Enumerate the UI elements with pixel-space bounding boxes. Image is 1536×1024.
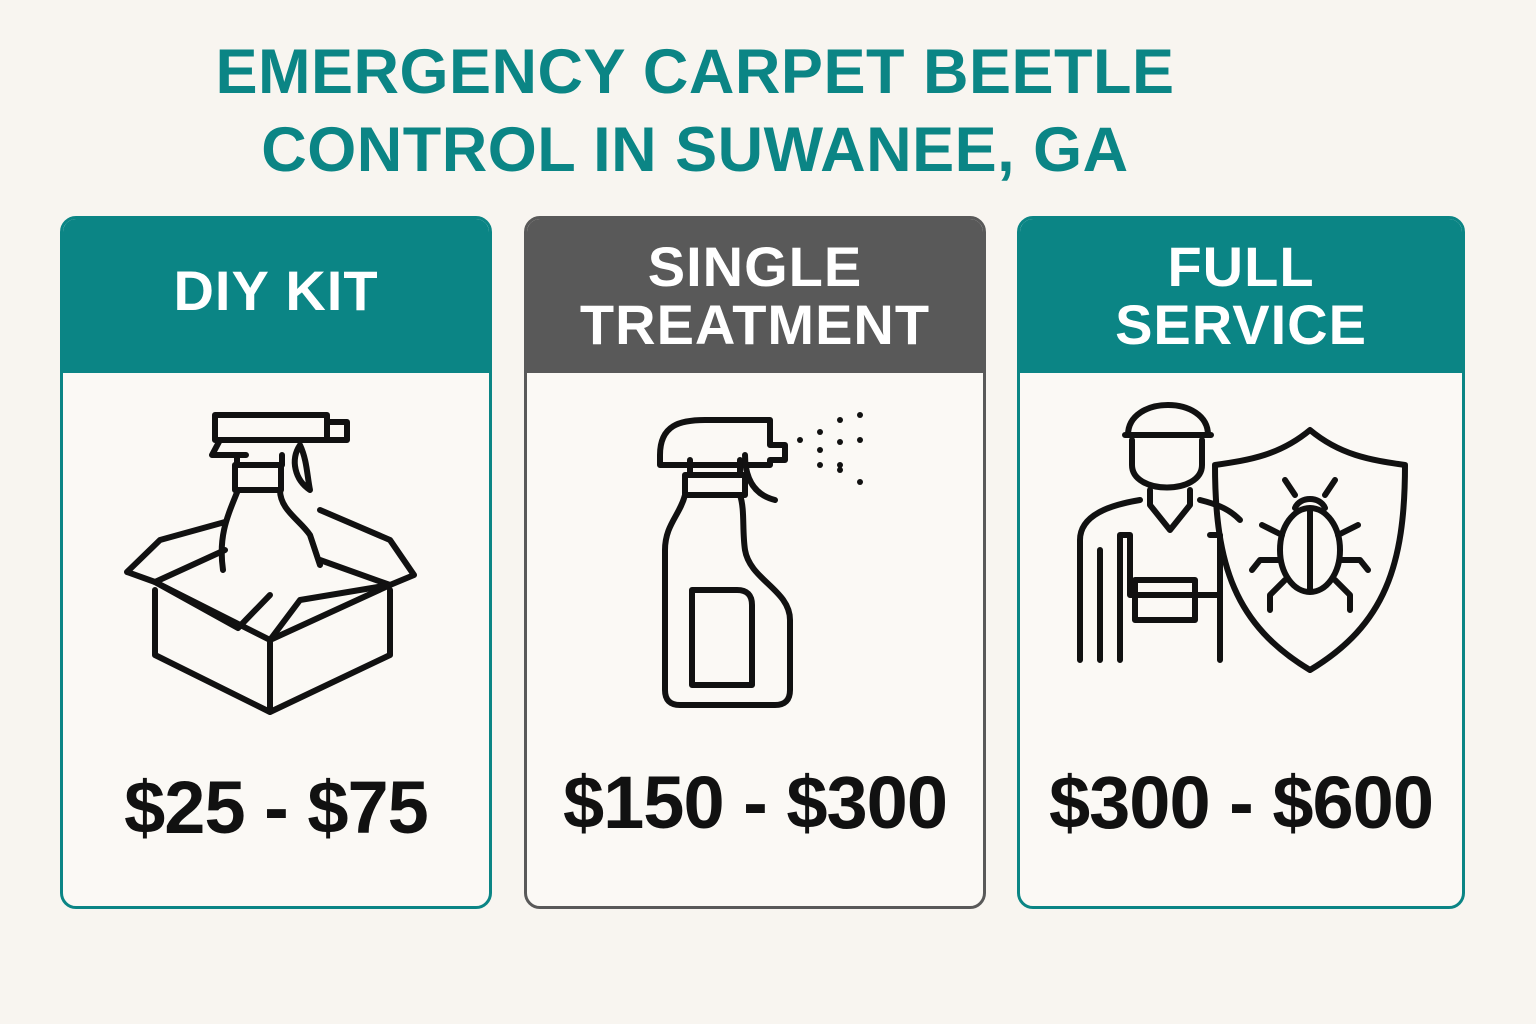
price: DIY kit: $25 - $75 xyxy=(124,766,428,849)
title: EMERGENCY CARPET BEETLE xyxy=(216,37,1174,107)
header: single treatment: TREATMENT xyxy=(580,293,930,356)
header: single treatment: SINGLE xyxy=(648,235,862,298)
icon: spray bottle xyxy=(657,412,863,708)
panel: single treatment xyxy=(524,216,986,909)
title: CONTROL IN SUWANEE, GA xyxy=(261,115,1129,185)
header: single treatment xyxy=(527,219,983,373)
header: DIY kit xyxy=(63,219,489,373)
title xyxy=(216,37,1174,185)
header: full service: FULL xyxy=(1167,235,1315,298)
price: full service: $300 - $600 xyxy=(1049,761,1433,844)
header: full service: SERVICE xyxy=(1115,293,1367,356)
icon: box with spray bottle xyxy=(124,412,417,715)
price: single treatment: $150 - $300 xyxy=(563,761,947,844)
header: full service xyxy=(1020,219,1462,373)
panel: DIY kit xyxy=(60,216,492,909)
header: DIY kit: DIY KIT xyxy=(173,259,379,322)
icon: technician with beetle shield xyxy=(1077,402,1408,673)
panel: full service xyxy=(1017,216,1465,909)
